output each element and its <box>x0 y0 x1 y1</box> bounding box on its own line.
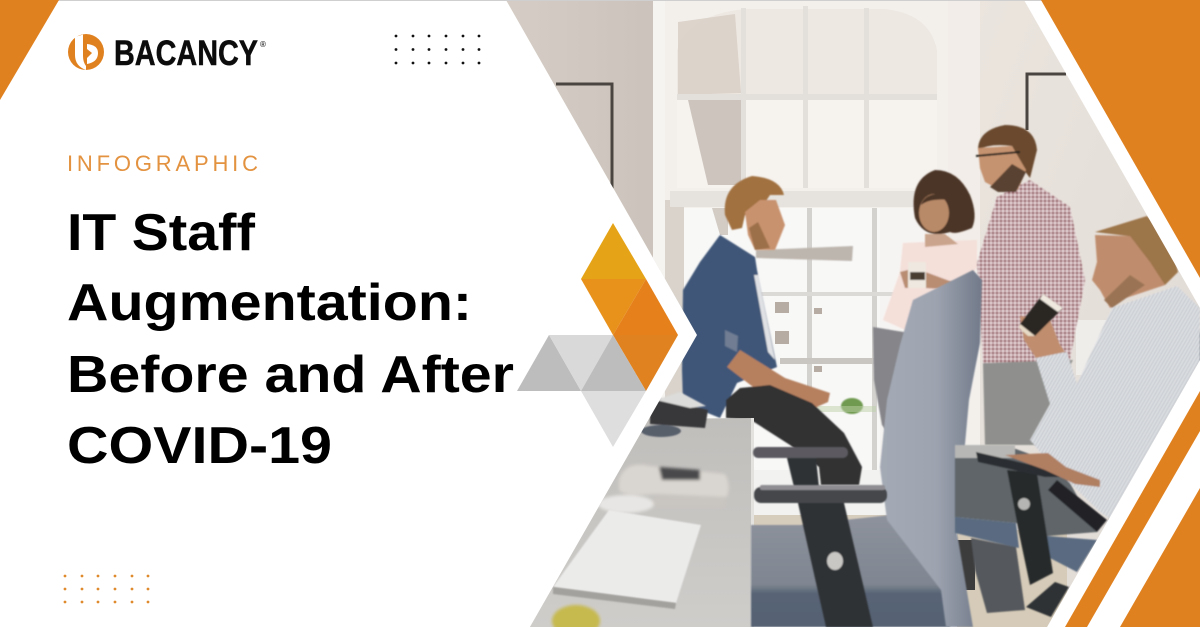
kicker: infographic: INFOGRAPHIC <box>67 151 258 176</box>
top edge line <box>0 0 1200 1</box>
front armrest and post <box>754 485 887 627</box>
right wall <box>975 0 1200 627</box>
bottom-right orange stripe <box>1065 391 1200 627</box>
man standing <box>976 125 1085 445</box>
left wall <box>500 0 660 627</box>
desk <box>520 418 753 627</box>
office photo illustration <box>500 0 1200 627</box>
front chair back <box>880 270 982 627</box>
man seated left <box>682 176 862 485</box>
title: Augmentation: <box>67 274 472 332</box>
woman <box>873 170 977 440</box>
logo wordmark: BACANCY <box>114 34 258 73</box>
yellow object <box>552 605 600 627</box>
title: Before and After <box>67 346 514 404</box>
triangle cluster <box>517 223 678 447</box>
title <box>67 204 514 475</box>
laptop and mouse <box>641 392 708 437</box>
top-right orange panel <box>1041 0 1200 278</box>
dot grid: top <box>395 35 480 64</box>
keyboard <box>553 510 701 603</box>
top-left orange corner triangle <box>0 0 59 100</box>
gray triangles <box>517 335 646 447</box>
man seated right <box>955 216 1200 617</box>
rear armrest <box>753 447 848 487</box>
wall pipes <box>556 74 1066 190</box>
logo <box>68 34 266 73</box>
orange triangles <box>581 223 678 391</box>
radiator <box>1076 320 1106 375</box>
headphones <box>598 465 729 513</box>
window <box>653 0 1067 627</box>
bottom-right orange corner <box>1120 488 1200 627</box>
title: IT Staff <box>67 204 256 262</box>
dot grid: bottom <box>64 575 149 603</box>
registered mark: ® <box>260 40 266 49</box>
title: COVID-19 <box>67 417 332 475</box>
logo icon <box>68 34 104 70</box>
front chair seat <box>751 515 950 627</box>
